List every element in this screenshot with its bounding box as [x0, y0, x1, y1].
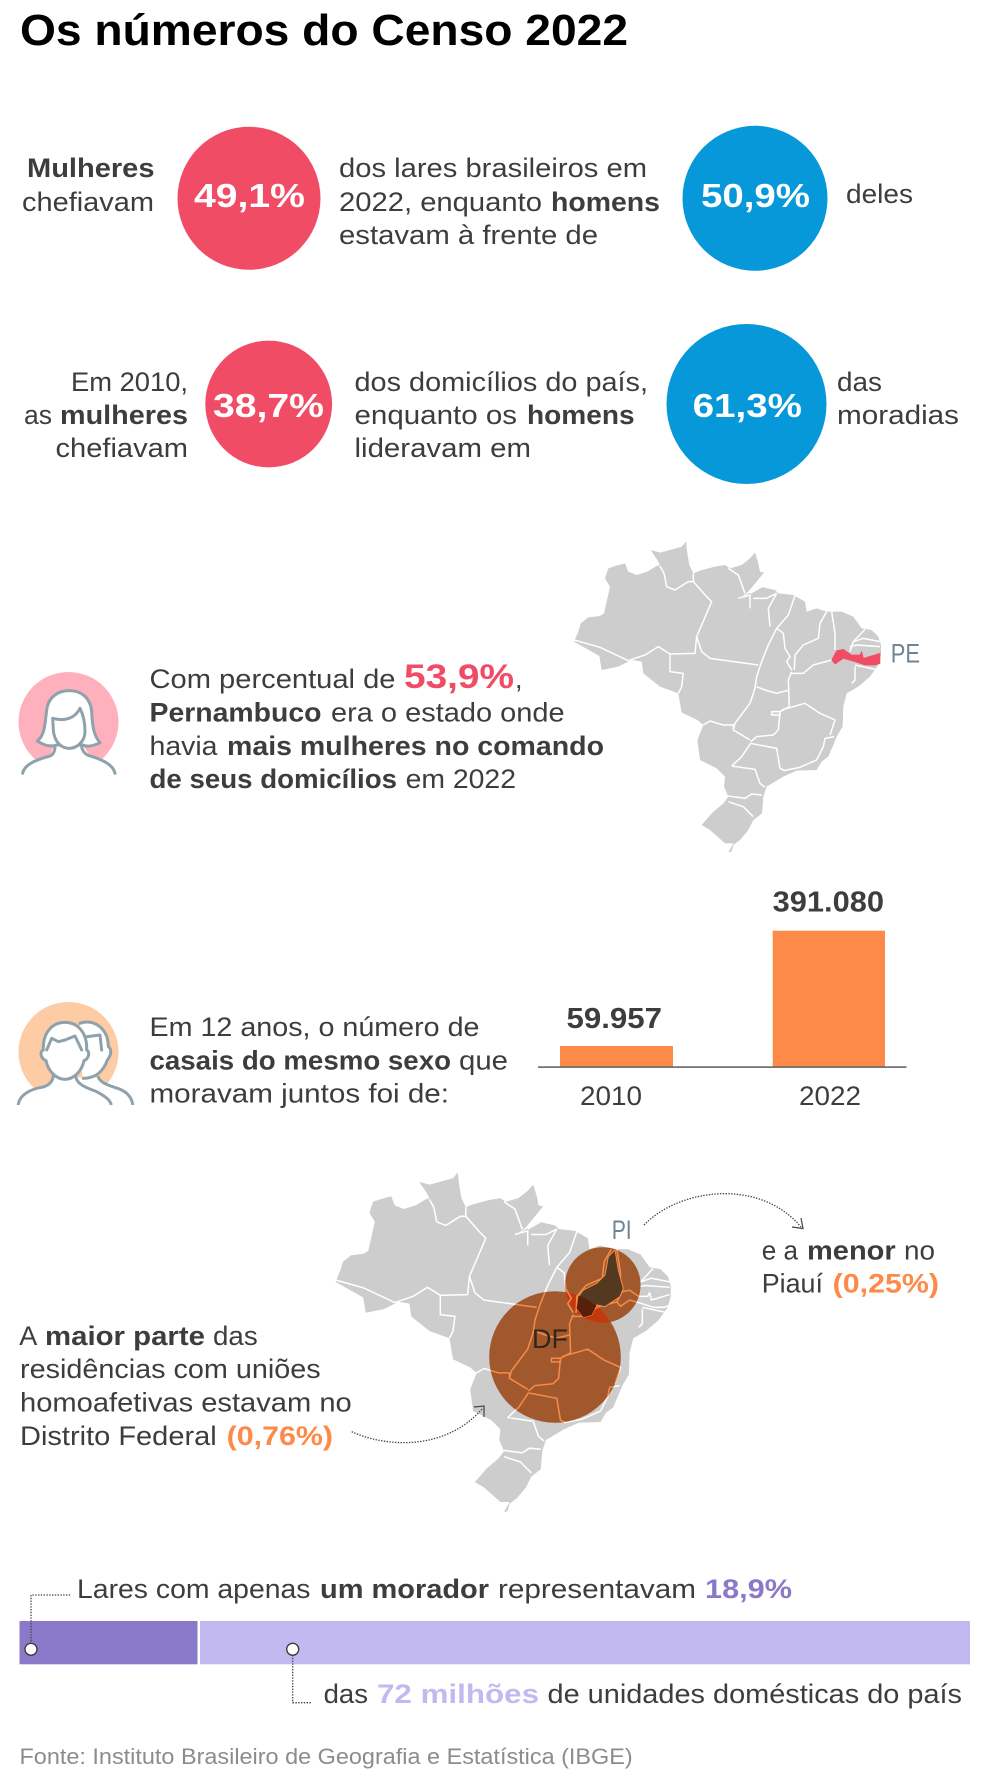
text: smallest share in Piauí: no — [904, 1235, 935, 1265]
text: 72 million units — [324, 1679, 962, 1709]
bar 2010 — [560, 1003, 673, 1111]
text: smallest share in Piauí: Piauí — [762, 1269, 823, 1299]
panel: homoaffective unions map — [19, 1173, 939, 1512]
leader: one resident — [25, 1595, 71, 1655]
text: domiciles description: lideravam em — [354, 433, 531, 463]
red circle 38,7% — [205, 341, 332, 467]
circle: PI — [565, 1247, 641, 1323]
text: couples description: Em 12 anos, o número de — [150, 1012, 480, 1042]
text: largest share in DF: das — [213, 1321, 258, 1351]
text: Pernambuco description: era o estado onde — [331, 698, 565, 728]
red circle 49,1%: 49,1% — [194, 177, 305, 214]
text: Pernambuco description: Pernambuco — [150, 698, 322, 728]
text: one resident — [77, 1574, 792, 1604]
text: one resident: Lares com apenas — [77, 1574, 310, 1604]
text: one resident: 18,9% — [705, 1574, 792, 1604]
blue circle 61,3%: 61,3% — [693, 387, 802, 424]
arrow: to Piauí text — [644, 1194, 803, 1228]
bar 2010: 59.957 — [566, 1003, 662, 1035]
text: largest share in DF — [19, 1321, 352, 1451]
text: largest share in DF: homoafetivas estavam no — [20, 1388, 352, 1418]
text: homes description: dos lares brasileiros em — [339, 153, 647, 183]
icon: woman — [18, 672, 118, 777]
text: couples description: que — [459, 1045, 508, 1075]
text: homes description: homens — [551, 187, 660, 217]
text: das moradias — [837, 367, 959, 430]
text: Pernambuco description: , — [515, 664, 523, 694]
text: homes description — [339, 153, 660, 250]
leader: 72 million — [287, 1643, 312, 1703]
circle: DF — [489, 1291, 621, 1423]
text: largest share in DF: (0,76%) — [227, 1421, 333, 1451]
text: Pernambuco description: havia — [150, 731, 219, 761]
map: Brazil with DF and PI circles — [335, 1173, 671, 1512]
text: homes description: estavam à frente de — [339, 220, 598, 250]
state: Piauí — [577, 1250, 623, 1317]
source: Fonte: Instituto Brasileiro de Geografia e Estatística (IBGE) — [20, 1744, 633, 1769]
text: smallest share in Piauí: menor — [807, 1235, 896, 1265]
panel: household heads 2022 — [22, 126, 913, 271]
text: Pernambuco description: em 2022 — [406, 764, 516, 794]
stacked bar — [20, 1621, 970, 1664]
text: largest share in DF: Distrito Federal — [20, 1421, 217, 1451]
text: in 2010 women: chefiavam — [56, 433, 188, 463]
text: smallest share in Piauí: e a — [762, 1235, 799, 1265]
text: in 2010 women: mulheres — [60, 400, 188, 430]
text: das moradias: moradias — [837, 400, 959, 430]
bar 2022 — [773, 887, 885, 1111]
text: in 2010 women: Em 2010, — [71, 367, 188, 397]
text: homes description: 2022, enquanto — [339, 187, 542, 217]
bar 2022: 2022 — [799, 1081, 861, 1111]
panel: single-resident homes — [20, 1574, 970, 1709]
text: domiciles description: homens — [527, 400, 635, 430]
blue circle 50,9% — [682, 126, 828, 271]
map: Brazil with Pernambuco highlighted — [574, 542, 881, 853]
text: women headed: chefiavam — [22, 187, 154, 217]
text: smallest share in Piauí — [762, 1235, 939, 1299]
red circle 38,7%: 38,7% — [213, 387, 324, 424]
panel: household heads 2010 — [24, 324, 959, 484]
text: couples description: casais do mesmo sexo — [150, 1045, 451, 1075]
text: largest share in DF: A — [19, 1321, 37, 1351]
circle overlap — [566, 1292, 610, 1323]
panel: Pernambuco — [18, 542, 920, 853]
blue circle 50,9%: 50,9% — [701, 177, 810, 214]
bar 2022: 391.080 — [773, 887, 884, 919]
icon: couple — [18, 1002, 133, 1105]
text: das moradias: das — [837, 367, 882, 397]
state: Pernambuco — [832, 649, 880, 665]
text: domiciles description: enquanto os — [354, 400, 517, 430]
title: Os números do Censo 2022 — [20, 6, 628, 55]
red circle 49,1% — [178, 127, 320, 270]
panel: same-sex couples — [18, 887, 907, 1111]
text: deles: deles — [846, 179, 913, 209]
text: women headed: Mulheres — [27, 153, 154, 183]
text: largest share in DF: residências com uniões — [20, 1354, 321, 1384]
text: one resident: um morador — [320, 1574, 490, 1604]
text: women headed — [22, 153, 154, 217]
bar chart — [538, 887, 906, 1111]
text: largest share in DF: maior parte — [45, 1321, 205, 1351]
text: domiciles description: dos domicílios do país, — [354, 367, 648, 397]
text: Pernambuco description: mais mulheres no comando — [227, 731, 604, 761]
label: PI: PI — [612, 1215, 632, 1245]
text: in 2010 women — [24, 367, 188, 463]
arrow: to DF — [352, 1406, 484, 1443]
bar 2010: 2010 — [580, 1081, 642, 1111]
text: Pernambuco description — [150, 658, 604, 794]
blue circle 61,3% — [666, 324, 826, 484]
text: domiciles description — [354, 367, 648, 463]
text: Pernambuco description: Com percentual de — [150, 664, 396, 694]
label: DF: DF — [532, 1324, 568, 1354]
text: 72 million units: de unidades domésticas do país — [548, 1679, 962, 1709]
text: couples description: moravam juntos foi de: — [150, 1079, 449, 1109]
text: Pernambuco description: de seus domicílios — [150, 764, 397, 794]
text: 72 million units: 72 milhões — [377, 1679, 539, 1709]
text: 72 million units: das — [324, 1679, 368, 1709]
label: PE: PE — [891, 639, 920, 669]
text: couples description — [150, 1012, 508, 1109]
text: smallest share in Piauí: (0,25%) — [833, 1269, 939, 1299]
text: one resident: representavam — [498, 1574, 696, 1604]
text: in 2010 women: as — [24, 400, 52, 430]
text: Pernambuco description: 53,9% — [404, 658, 514, 696]
